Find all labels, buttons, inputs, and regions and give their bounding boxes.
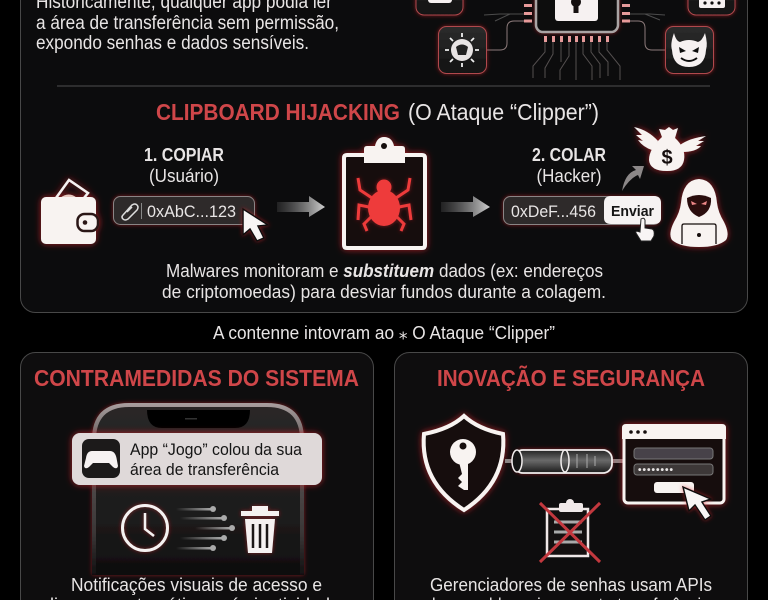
icon: devil tile <box>666 26 714 74</box>
address pill: swapped: 0xDeF...456 <box>511 202 596 221</box>
label: paste step <box>532 145 606 186</box>
label: paste step: (Hacker) <box>536 166 602 186</box>
icon: virus tile <box>438 26 486 74</box>
icon: wallet <box>41 180 98 244</box>
text block: notifications: Notificações visuais de acesso e <box>71 575 322 595</box>
notification card: área de transferência <box>130 460 280 479</box>
text block: history <box>36 0 339 54</box>
icon: cursor <box>243 209 268 241</box>
text block: malware description: Malwares monitoram e substituem dados (ex: endereços <box>166 261 603 281</box>
icon: winged money bag: $ <box>661 147 673 169</box>
icon: clock <box>122 506 168 550</box>
icon: shield with key <box>424 416 503 510</box>
icon: fading data lines <box>176 506 235 551</box>
icon: trash <box>241 506 279 553</box>
text block: malware description: de criptomoedas) para desviar fundos durante a colagem. <box>162 282 606 302</box>
label: copy step: (Usuário) <box>149 166 219 186</box>
address pill: original <box>114 196 254 224</box>
panel: top panel <box>20 0 748 312</box>
icon: crossed-out clipboard <box>540 499 600 562</box>
text block: history: expondo senhas e dados sensíveis. <box>36 33 309 54</box>
icon: chip with padlock and circuit <box>484 0 665 80</box>
icon: phone <box>94 405 302 575</box>
icon: encrypted tube <box>505 450 625 473</box>
heading: clipboard hijacking: (O Ataque “Clipper”) <box>408 99 599 125</box>
icon: top right tile <box>688 0 735 15</box>
heading: clipboard hijacking <box>156 99 599 125</box>
notification card <box>72 433 322 485</box>
arrow: to paste <box>441 196 490 217</box>
heading: countermeasures: CONTRAMEDIDAS DO SISTEMA <box>34 365 359 391</box>
notification card: App “Jogo” colou da sua <box>130 440 302 459</box>
panel: system countermeasures <box>20 352 374 600</box>
divider <box>57 86 710 87</box>
icon: browser login <box>622 424 726 503</box>
text block: password managers: Gerenciadores de senhas usam APIs <box>430 575 712 595</box>
arrow: curved to money <box>622 166 644 191</box>
text block: history: a área de transferência sem permissão, <box>36 13 339 34</box>
icon: browser login: •••••••• <box>638 465 674 476</box>
caption: A contenne intovram ao ⁎ O Ataque “Clipper” <box>213 323 555 343</box>
icon: cursor <box>683 487 711 520</box>
icon: top left tile <box>416 0 463 15</box>
icon: game controller <box>82 439 120 478</box>
label: copy step: 1. COPIAR <box>144 145 224 165</box>
panel: innovation and security <box>394 352 748 600</box>
label: paste step: 2. COLAR <box>532 145 606 165</box>
label: copy step <box>144 145 224 186</box>
icon: clipboard with bug <box>344 137 425 248</box>
heading: innovation: INOVAÇÃO E SEGURANÇA <box>437 364 705 391</box>
icon: pointing hand <box>636 218 654 241</box>
icon: hacker <box>670 179 728 247</box>
arrow: to clipboard <box>277 196 325 217</box>
icon: winged money bag <box>634 127 706 171</box>
text block: malware description <box>162 261 606 302</box>
address pill: swapped <box>504 196 661 224</box>
heading: clipboard hijacking: CLIPBOARD HIJACKING <box>156 99 400 125</box>
address pill: swapped: Enviar <box>611 203 654 220</box>
address pill: original: 0xAbC...123 <box>147 202 236 221</box>
